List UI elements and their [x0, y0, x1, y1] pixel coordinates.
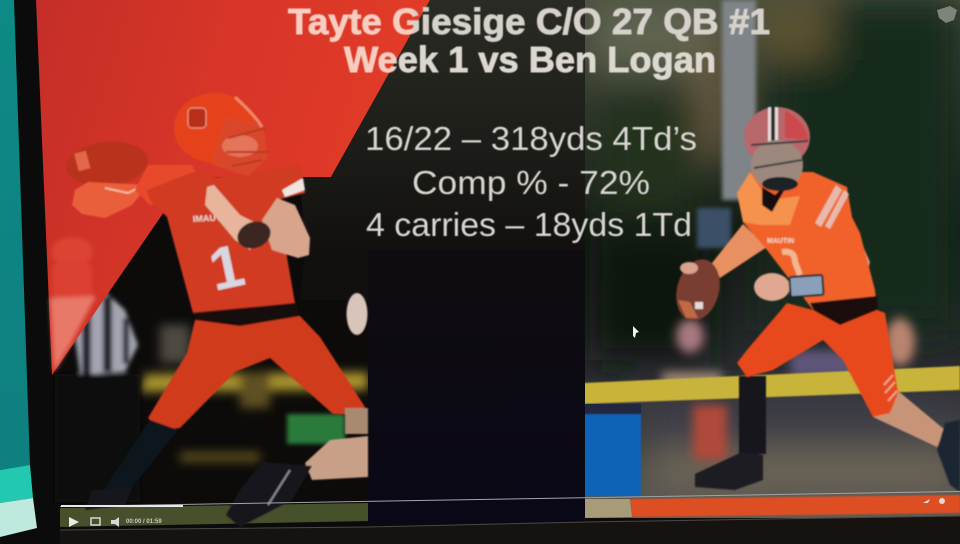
- helmet: [744, 107, 810, 191]
- belt: [810, 296, 878, 325]
- blurred sign: [697, 208, 731, 248]
- title: [288, 1, 770, 80]
- yellow fence right: [583, 366, 960, 404]
- light shoulder panel: [737, 172, 800, 225]
- tinted person behind: [50, 237, 96, 372]
- left photo backdrop: [36, 0, 368, 525]
- loop icon: [91, 518, 100, 525]
- mouse cursor: [633, 326, 639, 338]
- navy band above barrel: [583, 404, 641, 415]
- sock: [739, 376, 766, 454]
- completion line: Comp % - 72%: [412, 164, 650, 201]
- throwing arm: [135, 165, 205, 205]
- jersey: [737, 172, 876, 310]
- belt: [193, 303, 300, 328]
- field strip left: [60, 503, 368, 527]
- progress line: [60, 491, 960, 507]
- left background blurred: [140, 325, 368, 462]
- back leg: [873, 390, 945, 447]
- time label: 00:00 / 01:59: [126, 519, 162, 525]
- right photo backdrop: [585, 0, 960, 518]
- bottom field strip right: [583, 499, 632, 518]
- collar: [762, 180, 790, 212]
- left player photo: [50, 93, 368, 527]
- sleeve stripes: [815, 185, 849, 229]
- jersey number: 1: [203, 231, 250, 304]
- football: [670, 255, 726, 325]
- wristband: [789, 275, 824, 297]
- red diagonal panel: [36, 0, 430, 375]
- title line two: Week 1 vs Ben Logan: [344, 39, 716, 80]
- bottom orange strip: [630, 495, 960, 517]
- jersey: [147, 165, 305, 313]
- lead shoe: [85, 488, 132, 510]
- near arm: [262, 198, 310, 258]
- blurred trees: [590, 0, 960, 490]
- stats text block: [365, 120, 697, 243]
- left arm: [712, 224, 767, 278]
- blurred spectators right: [662, 318, 915, 460]
- back shoe: [226, 462, 312, 527]
- hand at panel edge: [346, 293, 368, 335]
- blue barrel: [583, 414, 641, 496]
- bezel highlight edge: [60, 516, 960, 530]
- dark area left of center panel: [300, 250, 368, 300]
- pants: [148, 316, 365, 430]
- lead leg sock: [100, 420, 178, 495]
- referee: [55, 287, 140, 502]
- ball in hand: [64, 138, 150, 218]
- wrist wrap: [234, 217, 274, 253]
- center lower black panel: [368, 248, 585, 523]
- elapsed progress: [61, 505, 183, 507]
- forearm and hand: [205, 185, 262, 250]
- name on jersey: MAUTIN: [767, 238, 794, 245]
- number: [782, 252, 800, 275]
- translucent dark overlay top center: [300, 0, 585, 250]
- play icon: [69, 517, 79, 527]
- blurred pole: [722, 0, 756, 200]
- passing line: 16/22 – 318yds 4Td’s: [365, 120, 697, 157]
- back shoe: [937, 420, 960, 492]
- settings icons: [939, 498, 945, 504]
- back leg skin: [305, 436, 368, 480]
- jersey name: IMAUTIN: [193, 212, 231, 224]
- shoulder stripes: [282, 178, 305, 197]
- near arm: [820, 210, 870, 292]
- right player photo: [670, 107, 960, 492]
- shoe: [695, 452, 763, 490]
- video player controls: [60, 491, 960, 527]
- pants: [737, 303, 898, 417]
- bottom monitor bezel: [60, 516, 960, 544]
- watermark icon: [937, 6, 957, 23]
- volume icon: [111, 517, 119, 527]
- adjacent teal screen: [0, 0, 37, 537]
- thigh skin right edge: [345, 408, 368, 434]
- green patch: [287, 414, 345, 444]
- title line one: Tayte Giesige C/O 27 QB #1: [288, 1, 770, 42]
- share icon: [923, 499, 930, 503]
- hand: [754, 273, 790, 301]
- helmet: [174, 93, 268, 176]
- rushing line: 4 carries – 18yds 1Td: [366, 206, 692, 243]
- pants stripes: [884, 375, 897, 401]
